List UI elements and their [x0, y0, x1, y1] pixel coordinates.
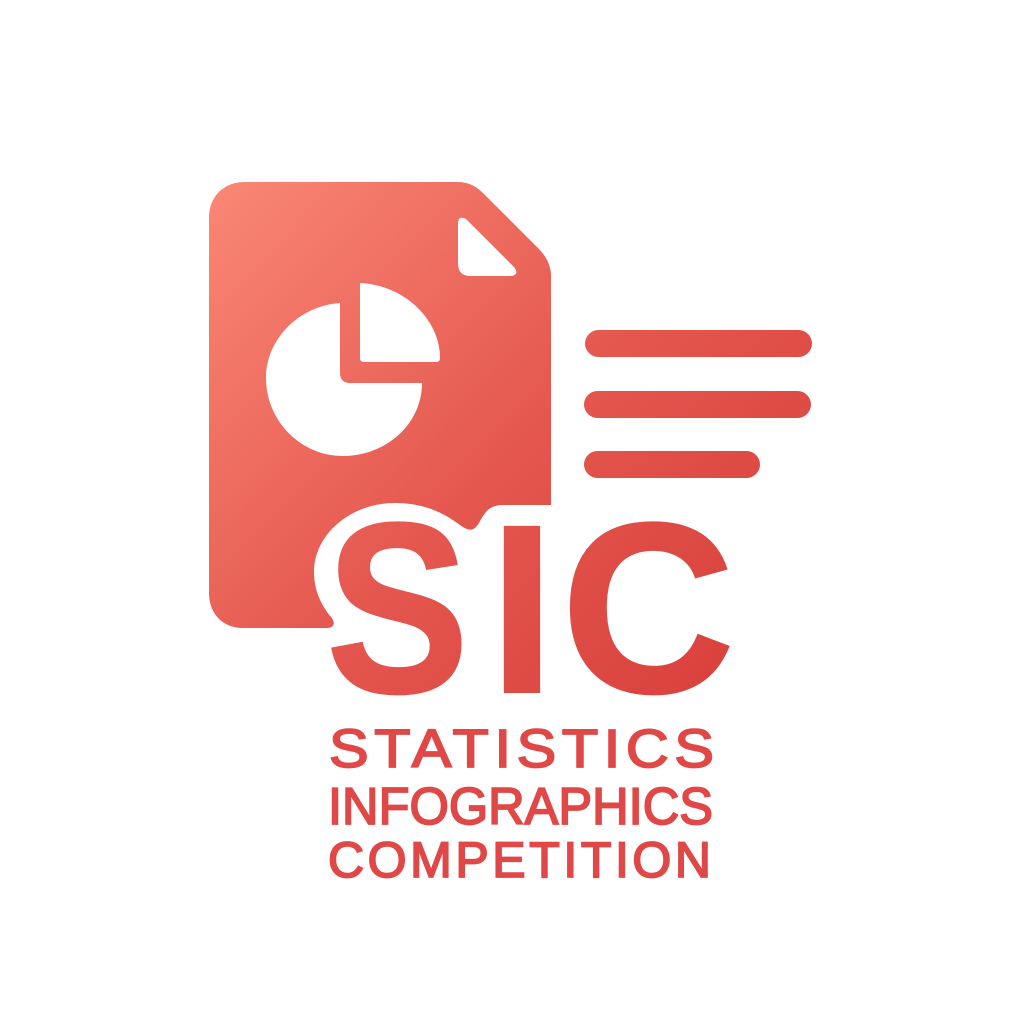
- subtitle: competition name: [328, 719, 714, 888]
- pie main slice: [266, 303, 422, 456]
- page fold: [458, 218, 516, 276]
- heading: SIC: [326, 473, 735, 745]
- heading: SIC: S: [326, 473, 469, 744]
- line: infographics: INFOGRAPHICS: [328, 778, 713, 836]
- icon: document with pie chart: [209, 182, 551, 628]
- pie quarter slice: [360, 283, 440, 362]
- line 3: [584, 451, 760, 478]
- document page: [209, 182, 551, 628]
- line 2: [584, 391, 811, 418]
- icon: text lines: [584, 330, 812, 478]
- heading: SIC: I: [487, 474, 557, 745]
- line: statistics: STATISTICS: [329, 719, 714, 779]
- heading: SIC: C: [561, 473, 735, 744]
- line: competition: COMPETITION: [328, 832, 711, 888]
- pie chart: [266, 283, 440, 456]
- line 1: [585, 330, 812, 357]
